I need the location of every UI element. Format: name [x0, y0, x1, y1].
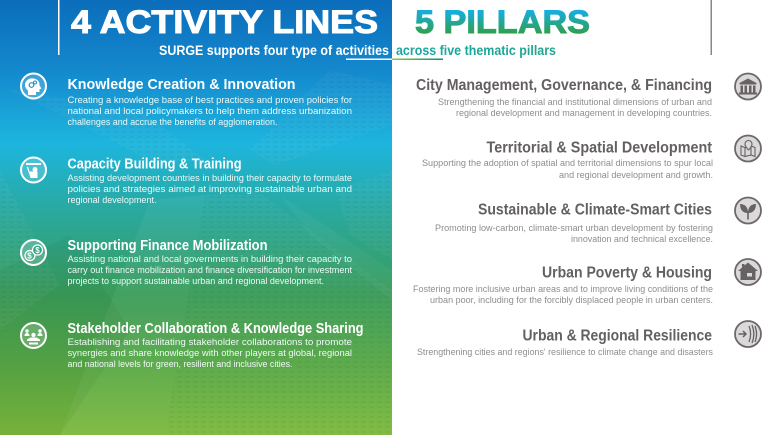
pillar: city management — [416, 74, 761, 119]
heading: Urban & Regional Resilience — [522, 328, 712, 344]
panel: pillars background — [392, 0, 780, 435]
description: Establishing and facilitating stakeholder collaborations to promote — [68, 337, 352, 348]
heading: City Management, Governance, & Financing — [416, 77, 712, 94]
heading: Supporting Finance Mobilization — [68, 237, 268, 254]
icon: coins: $ — [35, 246, 40, 255]
description: Assisting development countries in building their capacity to formulate — [68, 173, 352, 184]
icon: institution building — [735, 74, 761, 100]
icon: sprout — [735, 198, 761, 224]
pillar: territorial — [422, 136, 761, 181]
activity: stakeholder collaboration — [21, 320, 364, 370]
description: Fostering more inclusive urban areas and to improve living conditions of the — [413, 284, 713, 295]
description: Strengthening the financial and institutional dimensions of urban and — [438, 97, 712, 108]
icon: person with board — [21, 158, 46, 182]
description: carry out finance mobilization and finance diversification for investment — [68, 265, 352, 276]
description — [68, 95, 353, 128]
title: 5 pillars: 5 PILLARS — [415, 4, 590, 40]
subtitle left part: SURGE supports four type of activities — [159, 43, 389, 58]
pillar: sustainable cities — [435, 198, 761, 245]
activity: knowledge creation — [21, 74, 353, 128]
description: Strengthening cities and regions' resilience to climate change and disasters — [417, 347, 713, 358]
description — [68, 173, 352, 206]
icon: people at table — [21, 323, 46, 348]
heading: Stakeholder Collaboration & Knowledge Sharing — [68, 320, 364, 337]
description — [422, 158, 713, 181]
description — [413, 284, 713, 306]
activity: capacity building — [21, 156, 352, 206]
description: Promoting low-carbon, climate-smart urban development by fostering — [435, 223, 713, 234]
description: national and local policymakers to help them address urbanization — [68, 106, 352, 117]
description: regional development and management in developing countries. — [456, 108, 712, 119]
icon: coins — [21, 240, 46, 265]
description: projects to support sustainable urban and regional development. — [68, 276, 324, 287]
panel: activity lines background — [0, 0, 392, 435]
heading: Urban Poverty & Housing — [542, 264, 712, 282]
description: and regional development and growth. — [559, 170, 713, 181]
heading: Sustainable & Climate-Smart Cities — [478, 202, 712, 218]
pillar: resilience — [417, 321, 761, 358]
icon: head with gears — [21, 74, 46, 98]
description: synergies and share knowledge with other players at global, regional — [68, 348, 352, 359]
description: Creating a knowledge base of best practices and proven policies for — [68, 95, 353, 106]
activity: finance mobilization — [21, 237, 352, 287]
description — [435, 223, 713, 245]
pillar: urban poverty — [413, 259, 761, 306]
description: and national levels for green, resilient and inclusive cities. — [68, 359, 292, 370]
description: Assisting national and local governments in building their capacity to — [68, 254, 352, 265]
description: urban poor, including for the forcibly displaced people in urban centers. — [430, 295, 713, 306]
description: policies and strategies aimed at improving sustainable urban and — [68, 184, 352, 195]
icon: map with pin — [735, 136, 761, 162]
description — [68, 254, 352, 287]
heading: Knowledge Creation & Innovation — [68, 76, 296, 93]
icon: arrow into barrier — [735, 321, 761, 347]
title: 4 activity lines: 4 ACTIVITY LINES — [71, 4, 378, 40]
description: Supporting the adoption of spatial and territorial dimensions to spur local — [422, 158, 713, 169]
heading: Territorial & Spatial Development — [486, 140, 712, 156]
icon: house — [735, 259, 761, 285]
description: regional development. — [68, 195, 156, 206]
description — [68, 337, 352, 370]
description: innovation and technical excellence. — [571, 234, 713, 245]
subtitle right part: across five thematic pillars — [396, 43, 556, 58]
icon: coins: $ — [27, 252, 32, 260]
description: challenges and accrue the benefits of agglomeration. — [68, 117, 278, 128]
description — [438, 97, 712, 119]
heading: Capacity Building & Training — [68, 156, 242, 172]
